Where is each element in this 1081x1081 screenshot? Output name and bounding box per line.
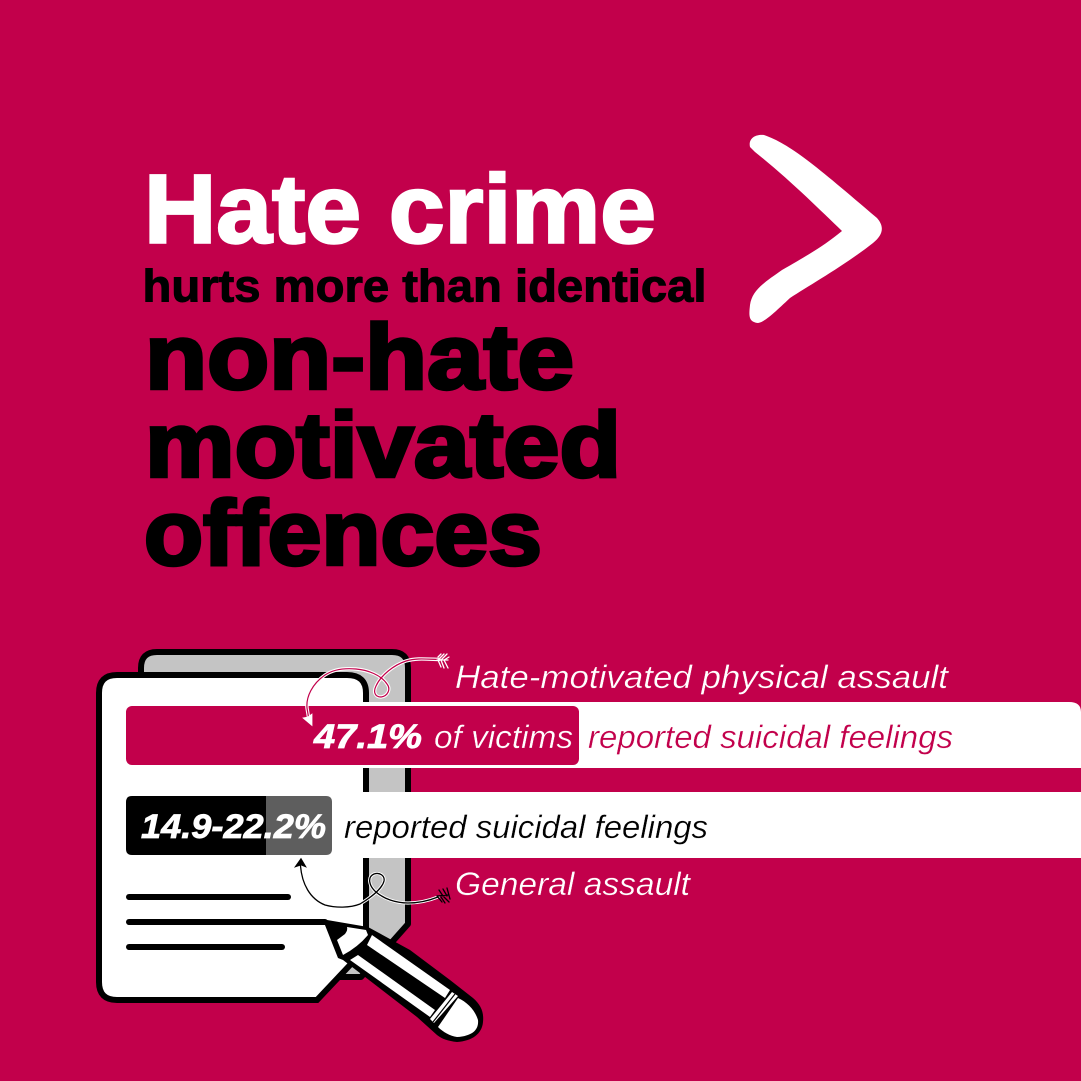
icon: greater-than chevron bbox=[749, 135, 882, 323]
icon: front document page bbox=[99, 675, 366, 1000]
arrow: hate-motivated label to bar bbox=[303, 654, 449, 726]
title block bbox=[142, 154, 706, 584]
heading: Hate crime: Hate crime bbox=[144, 154, 656, 264]
text: reported suicidal feelings, crimson: reported suicidal feelings bbox=[588, 719, 953, 755]
text: of victims: of victims bbox=[434, 719, 573, 755]
crimson highlight bar bbox=[126, 706, 579, 765]
heading: motivated: motivated bbox=[145, 394, 621, 496]
icon: back document page bbox=[141, 652, 408, 977]
heading: non-hate: non-hate bbox=[145, 306, 574, 408]
range bar: black and grey segments bbox=[126, 796, 332, 855]
arrow: general assault label to bar bbox=[295, 858, 450, 907]
white bar: general assault bbox=[122, 792, 1081, 858]
heading: offences: offences bbox=[144, 482, 542, 584]
stat: 47.1%: 47.1% bbox=[313, 718, 422, 756]
label: General assault: General assault bbox=[455, 866, 691, 902]
front page left part restored under bars bbox=[102, 702, 124, 858]
stat: 14.9-22.2%: 14.9-22.2% bbox=[141, 808, 326, 846]
subheading: hurts more than identical: hurts more than identical bbox=[142, 260, 706, 312]
text: reported suicidal feelings, black: reported suicidal feelings bbox=[344, 809, 708, 845]
icon: pencil bbox=[323, 919, 483, 1042]
label: Hate-motivated physical assault: Hate-motivated physical assault bbox=[455, 659, 949, 695]
white bar: hate-motivated bbox=[122, 702, 1081, 768]
